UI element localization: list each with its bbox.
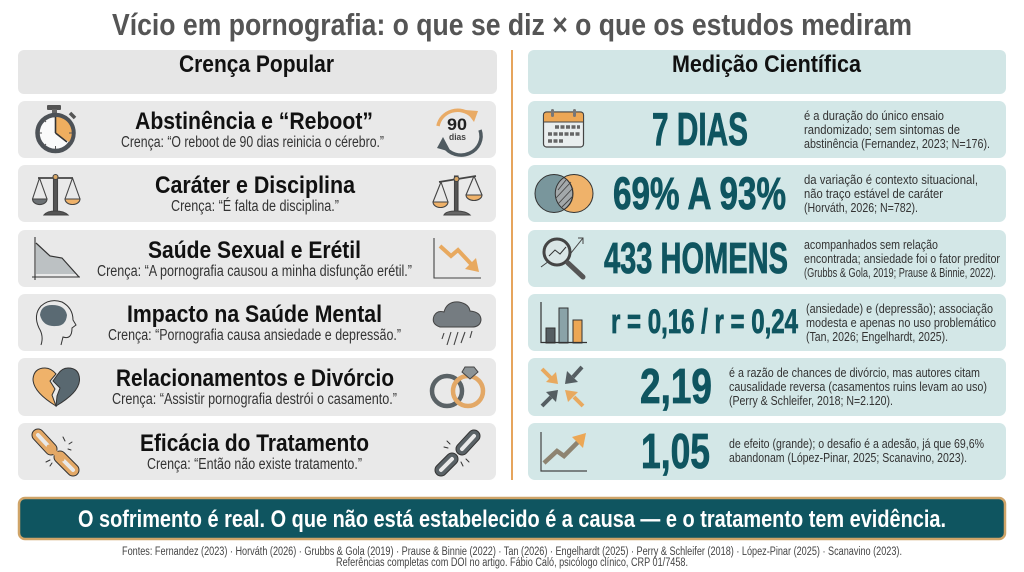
description <box>804 172 978 215</box>
heading: Saúde Sexual e Erétil <box>148 237 361 264</box>
icon: calendar <box>544 109 584 147</box>
big number: 69% A 93% <box>613 168 786 219</box>
icon: rising arrow chart <box>541 432 587 471</box>
icon: orange chain <box>38 435 73 470</box>
panel: medição 1 dias <box>528 101 1006 158</box>
description <box>729 436 984 465</box>
icon: 90 dias cycle: 90 <box>447 115 467 134</box>
panel: crença 3 saúde sexual <box>18 230 496 287</box>
panel: medição científica header: Medição Científica <box>672 51 862 78</box>
icon: balanced scale <box>32 174 80 215</box>
belief text: Crença: “Então não existe tratamento.” <box>147 456 362 473</box>
icon: stopwatch <box>38 105 75 151</box>
description <box>729 365 987 408</box>
panel: medição 5 divórcio <box>528 358 1006 416</box>
belief text: Crença: “A pornografia causou a minha disfunção erétil.” <box>97 263 412 280</box>
panel: crença popular header <box>18 50 497 94</box>
panel: crença 4 saúde mental <box>18 294 496 351</box>
heading: Eficácia do Tratamento <box>140 430 369 457</box>
panel: medição 2 variação <box>528 165 1006 222</box>
panel: medição 6 efeito <box>528 423 1006 480</box>
big number: 433 HOMENS <box>604 234 788 283</box>
big number: 7 DIAS <box>652 103 748 155</box>
icon: converging arrows <box>542 367 583 406</box>
panel: crença 6 tratamento <box>18 423 496 480</box>
description <box>804 108 990 151</box>
heading: Abstinência e “Reboot” <box>135 108 373 135</box>
icon: 90 dias cycle: dias <box>449 132 466 142</box>
central divider <box>511 50 513 480</box>
description: da variação é contexto situacional, <box>804 172 978 187</box>
big number: r = 0,16 / r = 0,24 <box>611 303 798 341</box>
sources footer <box>122 546 902 569</box>
heading: Impacto na Saúde Mental <box>127 301 382 328</box>
icon: wedding rings <box>432 367 483 406</box>
icon: magnifier with trend <box>541 238 583 277</box>
description: (Perry & Schleifer, 2018; N=2.120). <box>729 393 893 408</box>
belief text: Crença: “Assistir pornografia destrói o casamento.” <box>112 391 397 408</box>
heading: Caráter e Disciplina <box>155 172 356 199</box>
icon: venn diagram <box>535 174 593 212</box>
description: não traço estável de caráter <box>804 186 944 201</box>
belief text: Crença: “O reboot de 90 dias reinicia o cérebro.” <box>121 134 384 151</box>
big number: 2,19 <box>640 360 712 414</box>
panel: crença 5 relacionamentos <box>18 358 496 416</box>
description: (Horváth, 2026; N=782). <box>804 200 918 215</box>
description: randomizado; sem sintomas de <box>804 122 960 137</box>
icon: head with brain <box>36 301 76 345</box>
icon: rain cloud <box>433 302 481 345</box>
icon: falling arrow chart <box>434 238 481 278</box>
sources footer: Referências completas com DOI no artigo. Fábio Caló, psicólogo clínico, CRP 01/7458. <box>336 557 688 569</box>
description <box>804 237 1000 280</box>
panel: medição científica header <box>528 50 1006 94</box>
panel: crença 1 abstinência <box>18 101 496 158</box>
title: Vício em pornografia: o que se diz × o que os estudos mediram <box>112 7 912 42</box>
panel: crença popular header: Crença Popular <box>179 51 334 78</box>
belief text: Crença: “Pornografia causa ansiedade e depressão.” <box>108 327 401 344</box>
panel: medição 4 correlação <box>528 294 1006 351</box>
icon: declining area chart <box>32 237 80 280</box>
icon: broken heart <box>33 368 80 406</box>
icon: bar chart <box>541 302 587 343</box>
description: acompanhados sem relação <box>804 237 938 252</box>
heading: Relacionamentos e Divórcio <box>116 365 394 392</box>
icon: grey chain <box>441 436 474 470</box>
icon: 90 dias cycle <box>437 110 481 155</box>
big number: 1,05 <box>641 425 710 479</box>
panel: medição 3 homens <box>528 230 1006 287</box>
description: abandonam (López-Pinar, 2025; Scanavino, 2023). <box>729 450 967 465</box>
description: (Tan, 2026; Engelhardt, 2025). <box>806 329 948 344</box>
belief text: Crença: “É falta de disciplina.” <box>171 198 339 215</box>
description: é a duração do único ensaio <box>804 108 944 123</box>
icon: tilted scale <box>433 176 482 215</box>
description <box>806 301 996 344</box>
conclusion banner <box>19 498 1005 539</box>
panel: crença 2 caráter <box>18 165 496 222</box>
